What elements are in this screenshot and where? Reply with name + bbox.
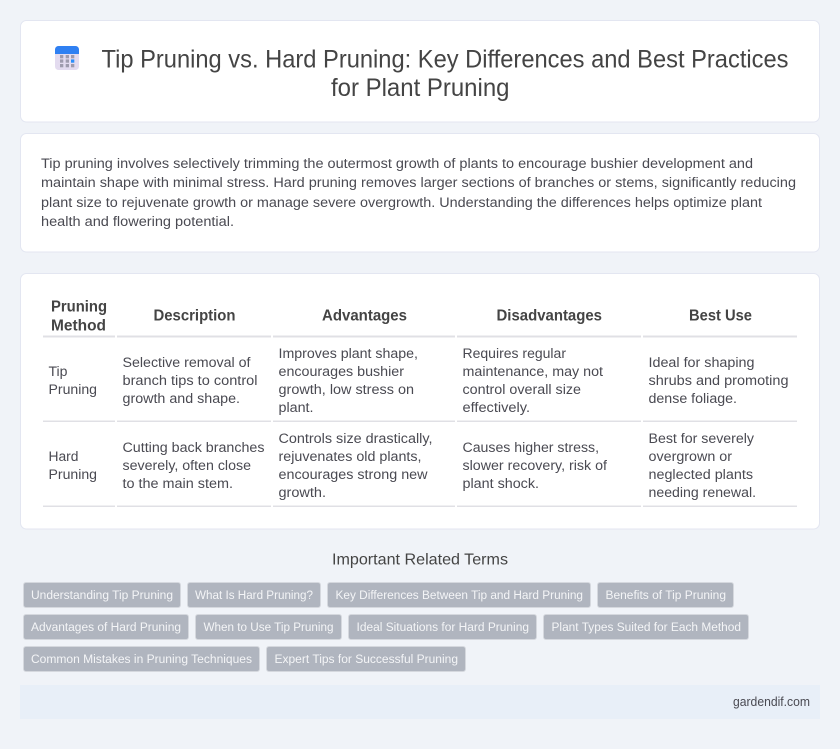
text block: introduction paragraph: health and flowering potential. (41, 214, 234, 230)
tag: expert tips (266, 646, 466, 672)
table header row: Advantages (322, 308, 407, 324)
table row: hard pruning: Cutting back branches (122, 440, 264, 456)
table row: tip pruning: growth and shape. (122, 391, 240, 407)
table row: hard pruning: neglected plants (648, 467, 753, 483)
table row: tip pruning: Improves plant shape, (278, 346, 418, 362)
table row: tip pruning: branch tips to control (122, 373, 258, 389)
table header row: Pruning (51, 298, 107, 316)
table row: hard pruning: slower recovery, risk of (462, 458, 607, 474)
table row: hard pruning: growth. (278, 485, 326, 501)
tag: expert tips: Expert Tips for Successful Pruning (274, 652, 458, 666)
table row: tip pruning: Ideal for shaping (648, 355, 754, 371)
heading: page title (102, 46, 788, 102)
table row: hard pruning: to the main stem. (122, 476, 233, 492)
table row: tip pruning: encourages bushier (278, 364, 404, 380)
tag: advantages of hard pruning: Advantages of Hard Pruning (31, 620, 181, 634)
tag: benefits of tip pruning: Benefits of Tip Pruning (606, 588, 726, 602)
tag: common mistakes: Common Mistakes in Pruning Techniques (31, 652, 252, 666)
table row: tip pruning: control overall size (462, 382, 581, 398)
table header row: Disadvantages (496, 308, 602, 324)
table row: tip pruning: dense foliage. (648, 391, 737, 407)
table row: tip pruning: growth, low stress on (278, 382, 414, 398)
table row: hard pruning: needing renewal. (648, 485, 756, 501)
table row: tip pruning: effectively. (462, 400, 530, 416)
table row: tip pruning: Requires regular (462, 346, 566, 362)
footer bar (20, 685, 820, 719)
tag: key differences (328, 582, 590, 608)
tag: advantages of hard pruning (24, 614, 188, 640)
heading: page title: for Plant Pruning (331, 74, 510, 102)
text block: introduction paragraph: maintain shape with minimal stress. Hard pruning removes larger sections of branches or stems, significantly reducing (41, 175, 796, 191)
tag: benefits of tip pruning (598, 582, 734, 608)
text block: introduction paragraph (41, 156, 796, 230)
table row: tip pruning: maintenance, may not (462, 364, 603, 380)
table row: hard pruning: severely, often close (122, 458, 251, 474)
table row: hard pruning: plant shock. (462, 476, 539, 492)
tag: what is hard pruning: What Is Hard Pruning? (195, 588, 313, 602)
table row: tip pruning: Selective removal of (122, 355, 251, 371)
related term tags (24, 582, 748, 672)
tag: understanding tip pruning (24, 582, 180, 608)
table row: tip pruning: Tip (48, 364, 68, 380)
table row: hard pruning: encourages strong new (278, 467, 428, 483)
table row: hard pruning: Controls size drastically, (278, 431, 432, 447)
text block: introduction paragraph: plant size to rejuvenate growth or manage severe overgrowth. Understanding the differences helps optimize plant (41, 195, 762, 211)
table row: hard pruning: Pruning (48, 467, 97, 483)
table row: hard pruning (43, 431, 797, 507)
tag: ideal situations (348, 614, 536, 640)
table row: tip pruning: plant. (278, 400, 314, 416)
table header row: Best Use (689, 308, 752, 324)
table header row: Method (51, 318, 106, 334)
table row: hard pruning: Causes higher stress, (462, 440, 599, 456)
tag: plant types: Plant Types Suited for Each Method (552, 620, 741, 634)
tag: common mistakes (24, 646, 260, 672)
table row: hard pruning: overgrown or (648, 449, 732, 465)
tag: when to use tip pruning (196, 614, 342, 640)
table row: hard pruning: Hard (48, 449, 78, 465)
tag: understanding tip pruning: Understanding Tip Pruning (31, 588, 173, 602)
panel: title header (20, 20, 820, 122)
tag: when to use tip pruning: When to Use Tip Pruning (204, 620, 334, 634)
table header row: Description (154, 308, 236, 324)
icon: calendar (55, 46, 79, 70)
text block: introduction paragraph: Tip pruning involves selectively trimming the outermost growth of plants to encourage bushier development and (41, 156, 753, 172)
tag: plant types (544, 614, 748, 640)
table row: tip pruning: Pruning (48, 382, 97, 398)
table row: hard pruning: rejuvenates old plants, (278, 449, 422, 465)
table row: tip pruning: shrubs and promoting (648, 373, 788, 389)
table row: hard pruning: Best for severely (648, 431, 755, 447)
table header row (43, 298, 797, 338)
heading: important related terms: Important Related Terms (332, 552, 508, 568)
footer source text: gardendif.com (733, 695, 810, 709)
tag: key differences: Key Differences Between Tip and Hard Pruning (336, 588, 583, 602)
panel: comparison table (20, 274, 820, 529)
panel: introduction (20, 134, 820, 252)
tag: ideal situations: Ideal Situations for Hard Pruning (356, 620, 529, 634)
tag: what is hard pruning (188, 582, 320, 608)
heading: page title: Tip Pruning vs. Hard Pruning: Key Differences and Best Practices (102, 46, 788, 74)
table row: tip pruning (43, 346, 797, 422)
